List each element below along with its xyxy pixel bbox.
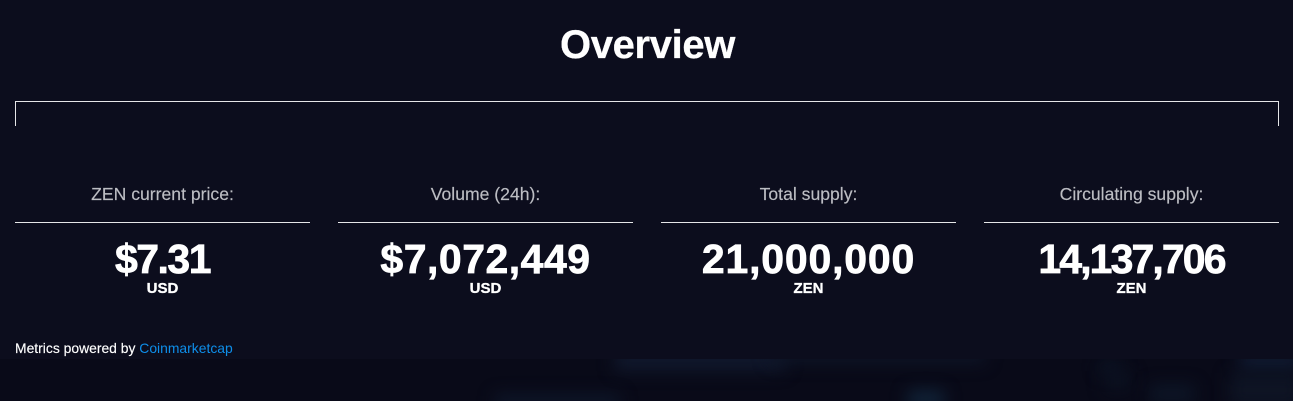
panel: ZEN current price: USD (147, 280, 178, 297)
panel: ZEN current price (15, 184, 310, 297)
panel: volume (338, 184, 633, 297)
panel: circulating supply (984, 184, 1279, 297)
attribution text: Metrics powered by Coinmarketcap (15, 340, 233, 356)
panel: circulating supply: 14,137,706 (1038, 236, 1225, 282)
panel: total supply: 21,000,000 (702, 236, 915, 282)
panel: total supply: ZEN (794, 280, 824, 297)
panel: volume: $7,072,449 (380, 236, 591, 282)
background: blurred strip (0, 359, 1293, 401)
panel: total supply: Total supply: (760, 184, 857, 204)
panel: ZEN current price: $7.31 (115, 236, 210, 282)
panel: ZEN current price: ZEN current price: (91, 184, 234, 204)
panel: circulating supply: Circulating supply: (1060, 184, 1203, 204)
title: Overview (560, 23, 735, 67)
panel: total supply (661, 184, 956, 297)
panel: volume: Volume (24h): (431, 184, 540, 204)
bracket frame (15, 101, 1279, 126)
panel: circulating supply: ZEN (1116, 280, 1146, 297)
panel: volume: USD (470, 280, 501, 297)
